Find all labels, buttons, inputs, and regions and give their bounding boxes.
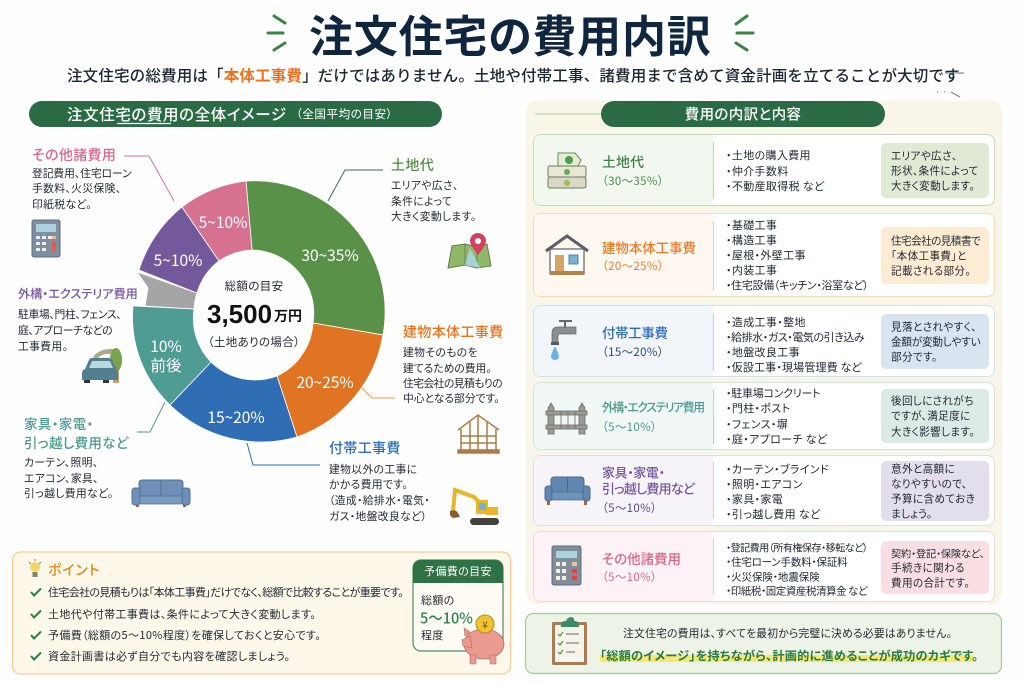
other list xyxy=(726,540,869,598)
furniture note: 意外と高額に xyxy=(891,462,955,476)
ancillary note xyxy=(881,314,989,369)
furniture list: ・家具・家電 xyxy=(726,491,783,507)
label: building xyxy=(362,322,503,406)
building list xyxy=(726,217,869,293)
segment: exterior purple: 5~10% xyxy=(154,249,202,271)
label: other costs: 印紙税など。 xyxy=(32,196,92,212)
conclusion text: 「総額のイメージ」を持ちながら、計画的に進めることが成功のカギです。 xyxy=(600,646,978,664)
left heading pill xyxy=(29,101,442,127)
point list: 資金計画書は必ず自分でも内容を確認しましょう。 xyxy=(48,648,290,664)
other note: 契約・登記・保険など、 xyxy=(891,546,985,560)
label: building: 建てるための費用。 xyxy=(403,360,492,376)
other list: ・登記費用（所有権保存・移転など） xyxy=(726,540,868,554)
land list: ・仲介手数料 xyxy=(726,163,789,179)
exterior list: ・庭・アプローチ など xyxy=(726,431,828,447)
subtitle xyxy=(67,64,964,97)
building list: ・住宅設備（キッチン・浴室など） xyxy=(726,277,869,293)
point list: 土地代や付帯工事費は、条件によって大きく変動します。 xyxy=(48,606,316,622)
label: exterior: 外構・エクステリア費用 xyxy=(18,284,138,302)
land list: ・土地の購入費用 xyxy=(726,147,811,163)
reserve fund card: 程度 xyxy=(421,627,444,643)
exterior title: 外構・エクステリア費用 xyxy=(602,398,705,416)
segment: building xyxy=(277,323,383,437)
land note: 大きく変動します。 xyxy=(891,178,975,194)
donut center total: 万円 xyxy=(274,306,302,326)
reserve fund card: 総額の xyxy=(421,592,455,608)
point list xyxy=(31,584,404,664)
breakdown heading pill xyxy=(601,101,885,127)
segment: furniture xyxy=(133,306,211,405)
icon: clipboard xyxy=(552,617,587,665)
conclusion text: 注文住宅の費用は、すべてを最初から完璧に決める必要はありません。 xyxy=(623,625,952,641)
segment: building: 20~25% xyxy=(296,371,354,393)
row: land xyxy=(534,134,994,206)
donut center total: 3,500 xyxy=(207,299,272,329)
exterior list: ・フェンス・塀 xyxy=(726,416,788,432)
row: land: （30〜35%） xyxy=(602,173,664,189)
label: exterior: 工事費用。 xyxy=(18,338,68,354)
segment: furniture: 前後 xyxy=(150,354,182,376)
panel: cost breakdown xyxy=(526,101,1002,604)
label: building: 中心となる部分です。 xyxy=(403,390,500,406)
reserve fund card: 予備費の目安 xyxy=(424,563,492,579)
icon: light bulb xyxy=(29,559,41,577)
other list: ・火災保険・地震保険 xyxy=(726,570,820,584)
donut center total: （土地ありの場合） xyxy=(208,334,300,350)
row: exterior xyxy=(534,382,994,450)
furniture list: ・照明・エアコン xyxy=(726,476,803,492)
icon: car and tree xyxy=(82,348,122,383)
icon: left title sparks xyxy=(268,16,285,50)
label: land: 土地代 xyxy=(391,155,434,175)
building note: 記載される部分。 xyxy=(891,264,971,278)
ancillary note: 見落とされやすく、 xyxy=(891,320,977,334)
segment: furniture: 10% xyxy=(150,335,182,357)
segment: other costs: 5~10% xyxy=(199,211,247,233)
building note: 住宅会社の見積書で xyxy=(891,234,981,248)
icon: house xyxy=(546,236,588,275)
label: land: 大きく変動します。 xyxy=(391,208,477,224)
exterior note: 大きく影響します。 xyxy=(891,424,975,440)
icon: calculator xyxy=(552,546,581,585)
row: furniture xyxy=(534,456,994,526)
icon: house frame xyxy=(458,415,499,453)
icon: faucet xyxy=(551,321,576,360)
label: furniture: 家具・家電・ xyxy=(24,413,94,433)
icon: map xyxy=(448,233,491,268)
reserve fund card xyxy=(413,560,503,651)
donut center total xyxy=(207,278,302,350)
panel: point box xyxy=(12,552,510,674)
icon: fence xyxy=(546,403,587,434)
row: other costs: （5〜10%） xyxy=(602,569,657,585)
other list: ・印紙税・固定資産税清算金 など xyxy=(726,584,869,598)
point heading: ポイント xyxy=(48,560,100,580)
building list: ・基礎工事 xyxy=(726,217,777,233)
panel: conclusion xyxy=(526,614,1002,674)
other list: ・住宅ローン手数料・保証料 xyxy=(726,554,848,570)
label: furniture: カーテン、照明、 xyxy=(24,454,99,470)
exterior note: ですが、満足度に xyxy=(891,408,971,424)
furniture note: 予算に含めておき xyxy=(891,492,975,506)
label: furniture: 引っ越し費用など xyxy=(24,432,130,452)
land title: 土地代 xyxy=(602,151,644,171)
label: furniture: エアコン、家具、 xyxy=(24,470,99,486)
building title: 建物本体工事費 xyxy=(602,237,696,257)
donut chart xyxy=(133,181,385,442)
label: building: 建物本体工事費 xyxy=(403,322,503,342)
exterior list: ・駐車場コンクリート xyxy=(726,385,821,401)
ancillary list: ・仮設工事・現場管理費 など xyxy=(726,359,862,375)
building list: ・内装工事 xyxy=(726,262,777,278)
conclusion text xyxy=(600,625,978,664)
other note: 費用の合計です。 xyxy=(891,576,970,590)
icon: excavator xyxy=(450,490,499,525)
label: ancillary work: 建物以外の工事に xyxy=(329,461,417,477)
icon: sofa xyxy=(132,480,190,507)
icon: calculator xyxy=(32,220,60,257)
icon: piggy bank xyxy=(462,615,504,664)
ancillary list: ・地盤改良工事 xyxy=(726,344,800,360)
land list xyxy=(726,147,825,194)
ancillary list: ・給排水・ガス・電気の引き込み xyxy=(726,329,865,345)
ancillary list: ・造成工事・整地 xyxy=(726,314,806,330)
icon: right title sparks xyxy=(736,16,753,50)
ancillary title: 付帯工事費 xyxy=(602,322,668,342)
segment: ancillary work: 15~20% xyxy=(207,406,265,428)
point list: 予備費（総額の5〜10%程度）を確保しておくと安心です。 xyxy=(48,627,321,643)
label: ancillary work: （造成・給排水・電気・ xyxy=(329,492,430,508)
ancillary note: 部分です。 xyxy=(891,350,938,364)
row: furniture: （5〜10%） xyxy=(602,500,657,516)
label: other costs: その他諸費用 xyxy=(32,145,116,165)
label: exterior xyxy=(18,284,138,354)
other note: 手続きに関わる xyxy=(891,560,965,576)
icon: money xyxy=(548,153,586,188)
building list: ・屋根・外壁工事 xyxy=(726,247,806,263)
donut center total: 総額の目安 xyxy=(225,278,283,294)
land note xyxy=(881,143,989,198)
label: building: 建物そのものを xyxy=(403,344,478,360)
label: exterior: 庭、アプローチなどの xyxy=(18,322,113,338)
furniture list: ・引っ越し費用 など xyxy=(726,506,821,522)
subtitle: 注文住宅の総費用は「本体工事費」だけではありません。土地や付帯工事、諸費用まで含めて資金計画を立てることが大切です xyxy=(67,64,960,86)
left heading pill: （全国平均の目安） xyxy=(296,106,393,122)
furniture note xyxy=(881,461,989,522)
breakdown heading pill: 費用の内訳と内容 xyxy=(685,104,801,124)
building list: ・構造工事 xyxy=(726,232,777,248)
ancillary list xyxy=(726,314,865,375)
left heading pill: 注文住宅の費用の全体イメージ xyxy=(67,103,287,125)
title: 注文住宅の費用内訳 xyxy=(309,1,712,65)
label: ancillary work: ガス・地盤改良など） xyxy=(329,508,427,524)
reserve fund card: 5〜10% xyxy=(420,608,473,628)
label: furniture xyxy=(24,402,165,501)
label: other costs xyxy=(32,145,174,212)
label: ancillary work: 付帯工事費 xyxy=(329,438,401,458)
exterior note: 後回しにされがち xyxy=(891,394,974,408)
label: other costs: 手数料、火災保険、 xyxy=(32,180,122,196)
other note xyxy=(881,541,989,594)
row: other costs xyxy=(534,532,994,602)
label: land: 条件によって xyxy=(391,193,452,209)
segment: land: 30~35% xyxy=(301,244,359,266)
building note xyxy=(881,227,989,284)
furniture note: ましょう。 xyxy=(891,506,932,522)
exterior list xyxy=(726,385,828,447)
segment: other costs xyxy=(182,181,252,261)
exterior note xyxy=(881,389,989,443)
segment: exterior purple xyxy=(139,207,219,293)
furniture note: なりやすいので、 xyxy=(891,476,967,492)
segment: land xyxy=(246,181,385,335)
label: ancillary work xyxy=(247,438,430,524)
icon: sofa xyxy=(545,477,590,505)
row: furniture: 引っ越し費用など xyxy=(602,478,696,498)
label: furniture: 引っ越し費用など。 xyxy=(24,485,114,501)
row: ancillary work: （15〜20%） xyxy=(602,344,664,360)
row: exterior: （5〜10%） xyxy=(602,419,657,435)
row: building: （20〜25%） xyxy=(602,258,664,274)
label: building: 住宅会社の見積もりの xyxy=(403,375,503,391)
label: land: エリアや広さ、 xyxy=(391,177,459,193)
building note: 「本体工事費」と xyxy=(891,248,967,264)
furniture list xyxy=(726,461,829,522)
row: ancillary work xyxy=(534,306,994,376)
land note: エリアや広さ、 xyxy=(891,148,957,164)
row: building xyxy=(534,214,994,296)
label: ancillary work: かかる費用です。 xyxy=(329,476,408,492)
ancillary note: 金額が変動しやすい xyxy=(891,334,981,350)
segment: ancillary work xyxy=(170,362,297,442)
label: exterior: 駐車場、門柱、フェンス、 xyxy=(18,306,122,322)
land note: 形状、条件によって xyxy=(891,164,979,178)
other title: その他諸費用 xyxy=(602,548,681,568)
label: other costs: 登記費用、住宅ローン xyxy=(32,165,132,181)
label: land xyxy=(328,155,477,224)
exterior list: ・門柱・ポスト xyxy=(726,400,790,416)
furniture title: 家具・家電・ xyxy=(602,462,665,482)
furniture list: ・カーテン・ブラインド xyxy=(726,461,829,477)
land list: ・不動産取得税 など xyxy=(726,178,825,194)
icon: piggy bank: ¥ xyxy=(482,616,488,632)
point list: 住宅会社の見積もりは「本体工事費」だけでなく、総額で比較することが重要です。 xyxy=(48,584,404,600)
segment: exterior xyxy=(137,272,197,309)
